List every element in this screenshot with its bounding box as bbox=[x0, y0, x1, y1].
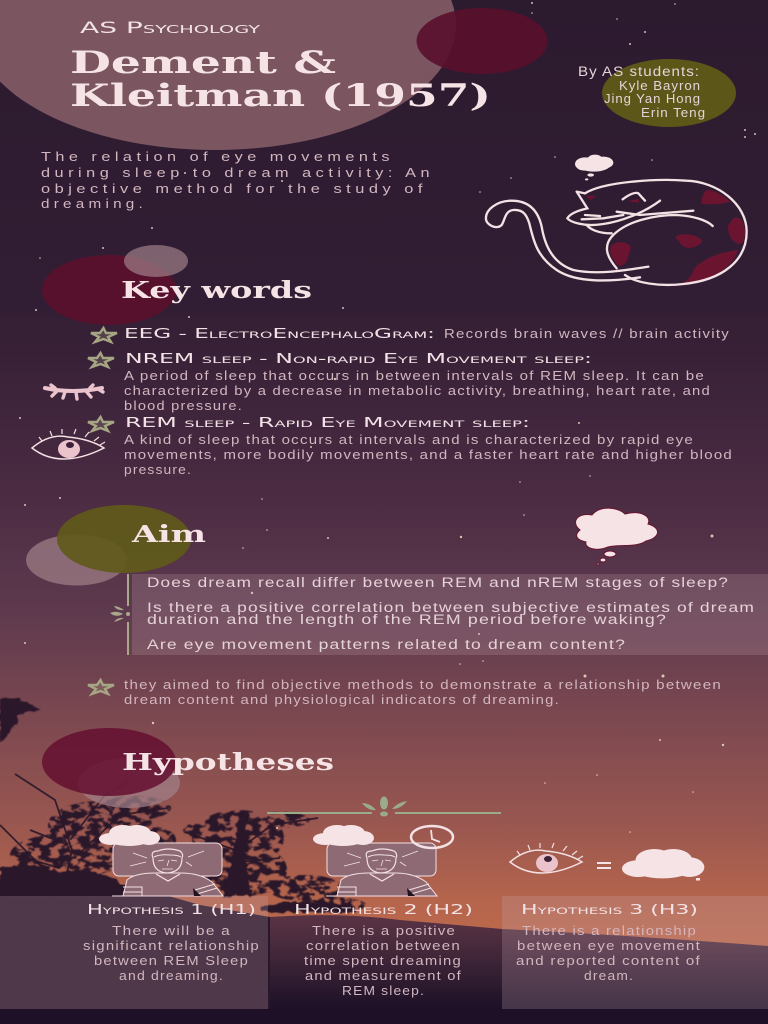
panel: hypothesis 3: between eye movement bbox=[517, 938, 701, 953]
background: stars bbox=[19, 2, 756, 833]
aim blobs bbox=[26, 505, 191, 586]
key term: NREM sleep: blood pressure. bbox=[124, 398, 243, 413]
panel: hypothesis 2: REM sleep. bbox=[342, 983, 425, 998]
key term: REM sleep: pressure. bbox=[124, 462, 192, 477]
authors: By AS students: bbox=[578, 64, 700, 79]
key term: REM sleep bbox=[88, 416, 733, 477]
panel: hypothesis 3: dream. bbox=[584, 968, 634, 983]
key term: EEG bbox=[91, 326, 730, 342]
study subtitle: The relation of eye movements bbox=[41, 149, 394, 164]
icon: open eye bbox=[32, 429, 105, 459]
background: hills silhouette bbox=[270, 915, 768, 1024]
icon: eye equals dream cloud (H3) bbox=[510, 843, 704, 880]
panel: aim questions: Does dream recall differ between REM and nREM stages of sleep? bbox=[147, 575, 729, 590]
heading: key words: Key words bbox=[121, 277, 312, 304]
heading: aim: Aim bbox=[131, 521, 206, 548]
panel: hypothesis 3: and reported content of bbox=[516, 953, 701, 968]
authors bbox=[578, 64, 706, 120]
key term: EEG: Records brain waves // brain activity bbox=[444, 326, 730, 341]
panel: hypothesis 2 bbox=[294, 903, 473, 998]
header shape: large mauve circle bbox=[0, 0, 456, 150]
background: dark ground behind left panel bbox=[0, 880, 270, 1024]
panel: hypothesis 2: There is a positive bbox=[312, 923, 456, 938]
aim note bbox=[88, 677, 722, 707]
panel: aim questions: Are eye movement patterns related to dream content? bbox=[147, 637, 626, 652]
study subtitle: during sleep to dream activity: An bbox=[41, 165, 434, 180]
panel: hypothesis 1: significant relationship bbox=[83, 938, 260, 953]
divider with sprout bbox=[267, 796, 501, 816]
panel: hypothesis 2: and measurement of bbox=[305, 968, 462, 983]
panel: aim questions: duration and the length of the REM period before waking? bbox=[147, 612, 667, 627]
bottom band bbox=[0, 1009, 768, 1024]
background: trees silhouette bbox=[0, 698, 366, 913]
panel: hypothesis 2: time spent dreaming bbox=[304, 953, 462, 968]
panel: hypothesis 1: and dreaming. bbox=[119, 968, 224, 983]
study subtitle bbox=[41, 149, 434, 211]
key words blobs bbox=[42, 245, 188, 325]
authors: Jing Yan Hong bbox=[604, 92, 701, 106]
aim note: dream content and physiological indicators of dreaming. bbox=[124, 692, 560, 707]
header shape: wine ellipse bbox=[416, 8, 548, 74]
panel: hypothesis 1: There will be a bbox=[112, 923, 231, 938]
icon: sleeper with dream cloud (H1) bbox=[99, 825, 223, 896]
header shape: olive ellipse bbox=[602, 59, 736, 127]
heading: hypotheses: Hypotheses bbox=[122, 749, 334, 776]
key term: NREM sleep: characterized by a decrease in metabolic activity, breathing, heart rate, and bbox=[124, 383, 711, 398]
course label: AS Psychology bbox=[80, 18, 260, 37]
icon: sleeper with dream cloud and clock (H2) bbox=[313, 825, 453, 896]
panel: hypothesis 1 bbox=[0, 896, 268, 1009]
key term: EEG: EEG - ElectroEncephaloGram: bbox=[124, 327, 435, 342]
panel: hypothesis 3 bbox=[502, 896, 768, 1009]
key term: NREM sleep: NREM sleep - Non-rapid Eye Movement sleep: bbox=[125, 352, 592, 367]
icon: sleeping cat with thought cloud bbox=[486, 155, 747, 285]
title bbox=[70, 45, 491, 114]
key term: REM sleep: REM sleep - Rapid Eye Movement sleep: bbox=[125, 416, 530, 431]
hypotheses blobs bbox=[42, 728, 180, 808]
aim note: they aimed to find objective methods to demonstrate a relationship between bbox=[124, 677, 722, 692]
panel: hypothesis 2: Hypothesis 2 (H2) bbox=[294, 903, 473, 918]
panel: hypothesis 1: Hypothesis 1 (H1) bbox=[87, 903, 256, 918]
title: Dement & bbox=[70, 45, 336, 81]
key term: REM sleep: A kind of sleep that occurs at intervals and is characterized by rapid eye bbox=[124, 432, 694, 447]
authors: Erin Teng bbox=[641, 106, 706, 120]
key term: NREM sleep bbox=[88, 352, 711, 413]
panel: hypothesis 3: There is a relationship bbox=[522, 923, 697, 938]
study subtitle: objective method for the study of bbox=[41, 181, 427, 196]
icon: closed eye bbox=[45, 385, 103, 399]
icon: sprout bbox=[110, 606, 130, 622]
panel: hypothesis 3: Hypothesis 3 (H3) bbox=[521, 903, 698, 918]
panel: aim questions bbox=[110, 574, 768, 655]
panel: hypothesis 2: correlation between bbox=[306, 938, 461, 953]
title: Kleitman (1957) bbox=[70, 78, 491, 114]
panel: hypothesis 1: between REM Sleep bbox=[94, 953, 249, 968]
authors: Kyle Bayron bbox=[619, 79, 701, 93]
panel: aim questions: Is there a positive correlation between subjective estimates of dream bbox=[147, 600, 755, 615]
icon: thought cloud bbox=[576, 508, 658, 565]
study subtitle: dreaming. bbox=[41, 196, 147, 211]
key term: REM sleep: movements, more bodily movements, and a faster heart rate and higher blood bbox=[124, 447, 733, 462]
key term: NREM sleep: A period of sleep that occurs in between intervals of REM sleep. It can be bbox=[124, 368, 705, 383]
